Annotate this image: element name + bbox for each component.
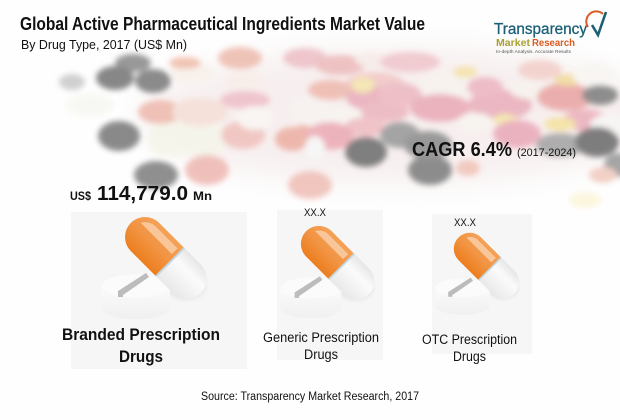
logo: Transparency Market Research: In-depth Analysis. Accurate Results	[496, 49, 572, 54]
headline value: US$	[70, 189, 91, 203]
value: generic: XX.X	[304, 207, 327, 219]
CAGR callout: (2017-2024)	[517, 147, 576, 159]
panel: generic prescription drugs	[263, 207, 383, 362]
icon: tablet and capsule	[102, 209, 215, 320]
subtitle: By Drug Type, 2017 (US$ Mn)	[21, 38, 187, 52]
logo: Transparency Market Research	[494, 11, 606, 54]
title: Global Active Pharmaceutical Ingredients Market Value	[20, 14, 425, 34]
logo: Transparency Market Research: Transparency	[494, 21, 587, 38]
value: otc: XX.X	[454, 217, 477, 229]
panel: otc prescription drugs	[422, 214, 532, 364]
background: blurred pills photo	[59, 47, 620, 208]
panel: otc prescription drugs: Drugs	[453, 349, 486, 364]
CAGR callout	[412, 139, 576, 161]
label: otc prescription drugs: OTC Prescription	[422, 332, 517, 347]
icon: tablet and capsule	[435, 226, 526, 315]
panel: branded prescription drugs: Drugs	[119, 348, 163, 366]
headline value	[70, 183, 212, 205]
CAGR callout: CAGR 6.4%	[412, 139, 512, 161]
icon: tablet and capsule	[280, 218, 382, 318]
icon: logo check mark	[592, 12, 606, 35]
headline value: Mn	[193, 189, 212, 203]
label: branded prescription drugs: Branded Prescription	[62, 326, 220, 344]
panel background	[277, 210, 383, 360]
panel: generic prescription drugs: Drugs	[304, 347, 338, 362]
source: Source: Transparency Market Research, 2017	[201, 391, 419, 403]
label: generic prescription drugs: Generic Prescription	[263, 330, 379, 345]
logo: Transparency Market Research: Research	[532, 37, 575, 49]
panel: branded prescription drugs	[62, 209, 247, 369]
panel background	[432, 214, 532, 354]
logo: Transparency Market Research: Market	[496, 37, 530, 49]
panel background	[71, 212, 247, 369]
headline value: 114,779.0	[97, 183, 188, 205]
